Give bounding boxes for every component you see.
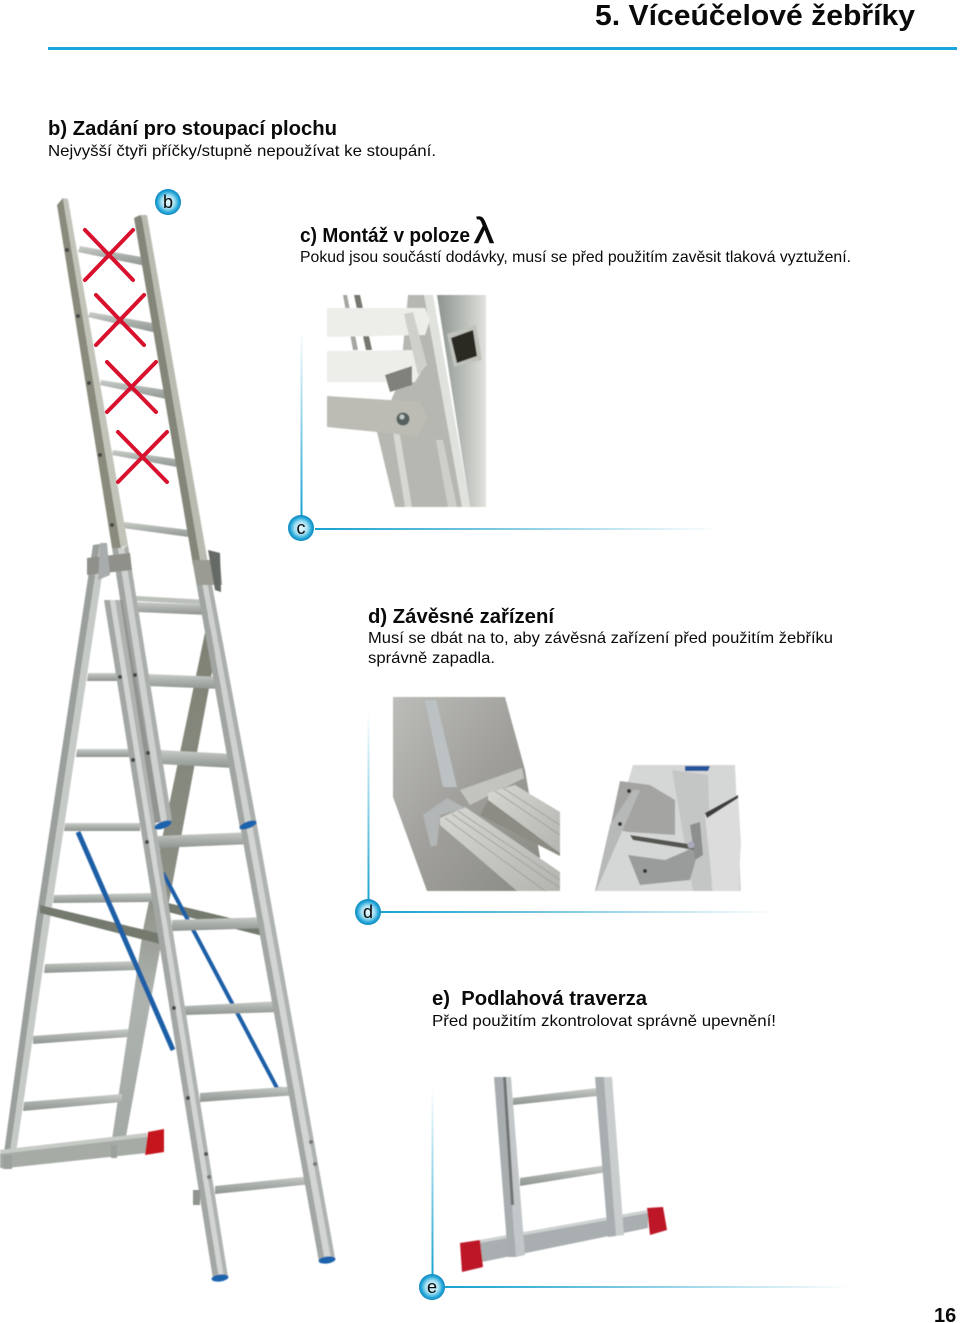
photo e: floor traverse — [460, 1077, 667, 1272]
clamps — [87, 543, 222, 592]
leader line e — [432, 1088, 850, 1288]
lower left rail — [104, 600, 219, 1279]
badge e — [419, 1274, 445, 1300]
badge b: b — [163, 192, 173, 212]
red crosses: rungs not to use — [85, 230, 167, 482]
badge c: c — [296, 518, 306, 538]
badge d — [355, 899, 381, 925]
badge c — [288, 515, 314, 541]
section d heading and text: Musí se dbát na to, aby závěsná zařízení před použitím žebříku — [368, 630, 833, 647]
leader line c — [300, 330, 720, 530]
title: 5. Víceúčelové žebříky — [595, 0, 915, 32]
section e heading and text: e) Podlahová traverza — [432, 988, 648, 1010]
leader line d — [368, 712, 775, 913]
extension rails — [112, 548, 161, 823]
section d heading and text — [368, 606, 833, 667]
section c heading and text — [300, 210, 851, 266]
photo c: pressure brace mounting — [327, 295, 486, 507]
section b heading and text: Nejvyšší čtyři příčky/stupně nepoužívat ke stoupání. — [48, 143, 436, 160]
top section rails — [57, 198, 121, 548]
section e heading and text: Před použitím zkontrolovat správně upevnění! — [432, 1013, 776, 1030]
icon: red traverse cap — [145, 1129, 164, 1155]
badge b — [155, 189, 181, 215]
section b heading and text — [48, 118, 436, 160]
section c heading and text: c) Montáž v poloze — [300, 225, 470, 247]
section b heading and text: b) Zadání pro stoupací plochu — [48, 118, 337, 140]
upper extension section — [57, 198, 258, 844]
back A-frame section — [0, 543, 263, 1169]
section c heading and text: λ — [474, 210, 494, 251]
blue straps — [78, 832, 286, 1101]
section d heading and text: správně zapadla. — [368, 650, 495, 667]
section c heading and text: Pokud jsou součástí dodávky, musí se před použitím zavěsit tlaková vyztužení. — [300, 249, 851, 266]
photo d left: hook on rung — [393, 697, 560, 891]
badge e: e — [427, 1277, 437, 1297]
lower front ladder section — [104, 600, 336, 1283]
header rule — [48, 47, 957, 50]
badge d: d — [363, 902, 373, 922]
ladder illustration — [0, 198, 336, 1283]
section d heading and text: d) Závěsné zařízení — [368, 606, 555, 628]
icon: red traverse feet — [460, 1207, 667, 1272]
section e heading and text — [432, 988, 776, 1030]
photo d right: clamp detail — [595, 765, 741, 891]
lower right rail — [240, 825, 325, 1262]
